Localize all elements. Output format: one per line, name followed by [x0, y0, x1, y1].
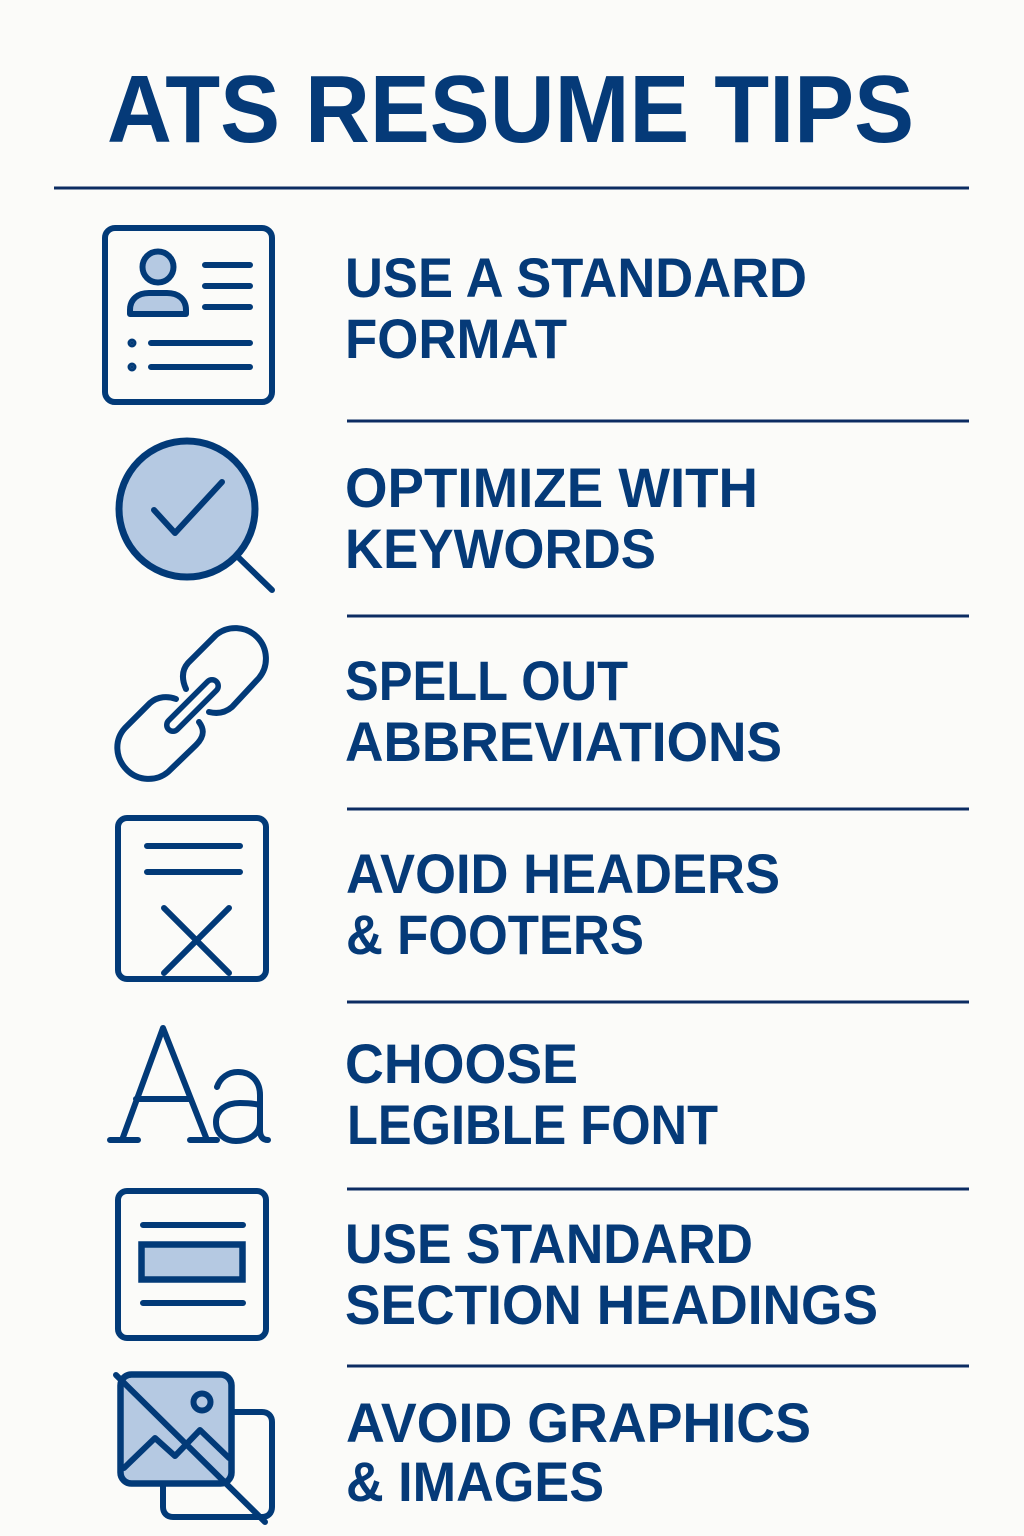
tip text — [345, 649, 782, 773]
icon: page with cross — [118, 818, 266, 979]
icon: page with highlighted heading — [118, 1191, 266, 1338]
tip 3: spell out abbreviations — [117, 628, 782, 779]
title: ATS RESUME TIPS — [107, 56, 914, 163]
tip text — [346, 1391, 811, 1513]
tip text — [345, 1032, 718, 1156]
tip text: USE A STANDARD — [345, 246, 807, 309]
tip text: AVOID HEADERS — [346, 842, 780, 905]
icon: crossed-out images — [116, 1374, 272, 1522]
tip text: SECTION HEADINGS — [345, 1273, 878, 1336]
icon: resume profile — [105, 228, 272, 402]
tip 7: avoid graphics and images — [116, 1374, 811, 1522]
tip text: CHOOSE — [345, 1032, 578, 1095]
tip 6: use standard section headings — [118, 1191, 878, 1338]
icon: Aa letterforms — [110, 1028, 268, 1141]
tip text: & FOOTERS — [346, 903, 644, 966]
tip 2: optimize with keywords — [119, 441, 758, 590]
tip text: FORMAT — [345, 307, 567, 370]
tip text — [345, 246, 807, 370]
tip text — [345, 1212, 878, 1336]
tip text: SPELL OUT — [345, 649, 628, 712]
icon: magnifier with check — [119, 441, 272, 590]
tip text: & IMAGES — [346, 1450, 604, 1513]
tip text: LEGIBLE FONT — [347, 1093, 718, 1156]
tip 4: avoid headers and footers — [118, 818, 780, 979]
tip text: AVOID GRAPHICS — [346, 1391, 811, 1454]
tip text: ABBREVIATIONS — [345, 710, 782, 773]
tip text — [346, 842, 780, 966]
tip 1: use a standard format — [105, 228, 807, 402]
tip 5: choose legible font — [110, 1028, 718, 1156]
icon: chain link — [117, 628, 266, 779]
tip text: KEYWORDS — [345, 517, 656, 580]
tip text — [345, 456, 758, 580]
tip text: OPTIMIZE WITH — [345, 456, 758, 519]
tip text: USE STANDARD — [345, 1212, 753, 1275]
